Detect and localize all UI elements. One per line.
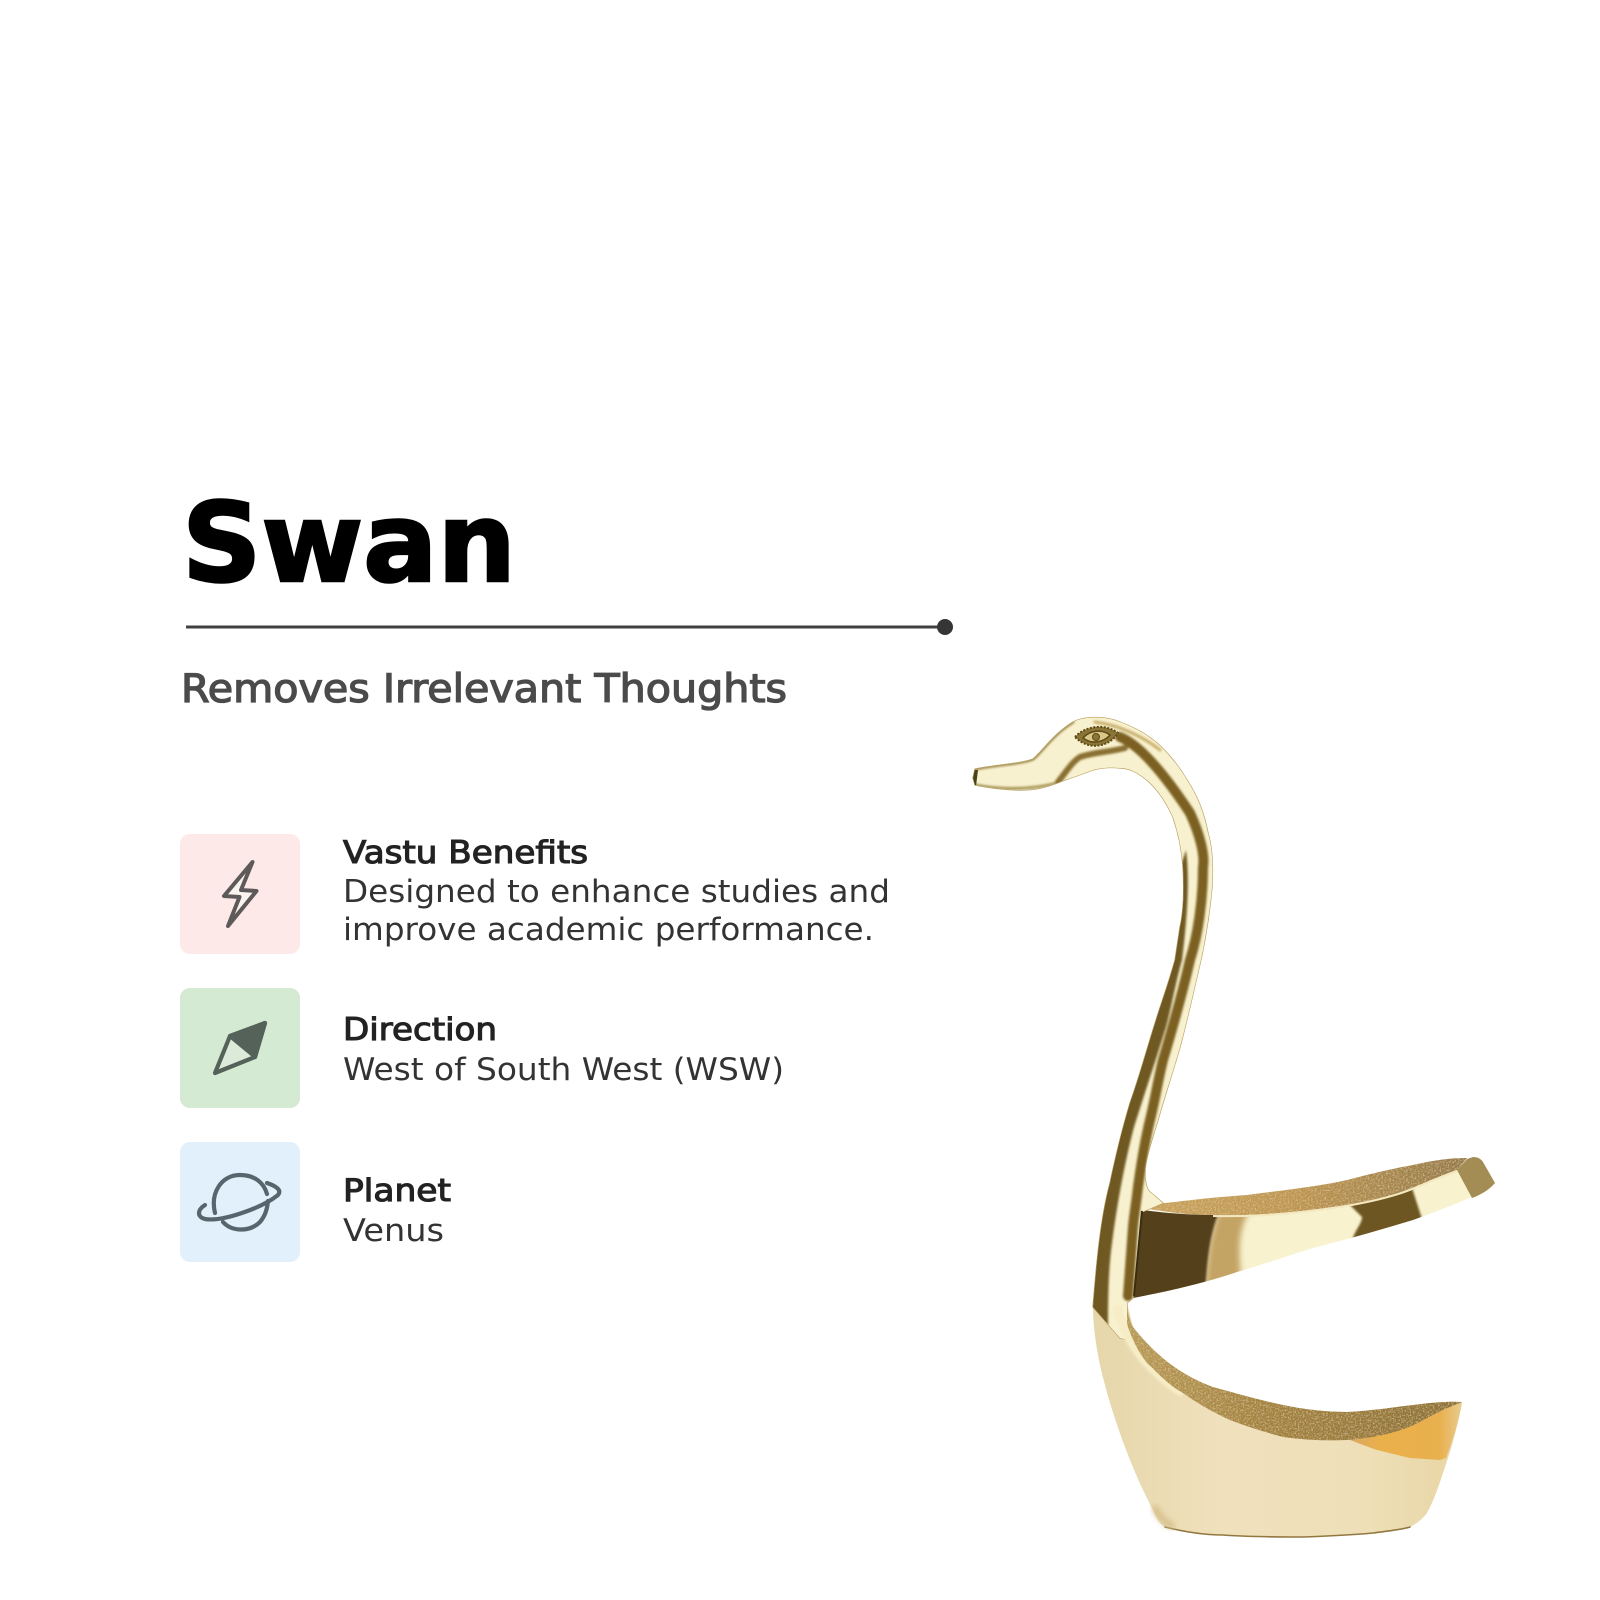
icon tile: pink: [180, 834, 300, 954]
panel: direction: [180, 988, 784, 1108]
icon tile: green: [180, 988, 300, 1108]
planet heading: Planet: [343, 1173, 451, 1209]
brass swan figurine: [960, 700, 1495, 1537]
icon: lightning bolt: [224, 862, 256, 926]
planet value: Venus: [343, 1213, 444, 1249]
swan bowl interior: [1127, 1303, 1462, 1440]
panel: vastu benefits: [180, 834, 890, 954]
benefit description second line: improve academic performance.: [343, 912, 874, 948]
title: Swan: [182, 479, 516, 607]
subtitle: Removes Irrelevant Thoughts: [181, 667, 787, 712]
direction value: West of South West (WSW): [343, 1052, 784, 1088]
swan neck and head: [972, 716, 1214, 1340]
swan bowl orange highlight: [1350, 1402, 1462, 1460]
benefit heading: Vastu Benefits: [343, 835, 588, 871]
swan eye engraving: [1075, 727, 1118, 746]
swan tail ring band: [1134, 1170, 1472, 1298]
swan bowl body: [1093, 1303, 1462, 1537]
benefit description: Designed to enhance studies and: [343, 874, 890, 910]
icon: compass needle: [215, 1023, 265, 1073]
divider line with dot: [186, 619, 953, 635]
swan tail ring tip: [1457, 1157, 1495, 1198]
swan tail ring interior: [1143, 1158, 1467, 1215]
swan lip highlight: [1117, 1305, 1183, 1393]
swan tail ring rim line: [1213, 1171, 1457, 1216]
panel: planet: [180, 1142, 451, 1262]
swan base shadow: [1155, 1508, 1410, 1537]
icon tile: blue: [180, 1142, 300, 1262]
swan neck seam: [1134, 1211, 1142, 1296]
direction heading: Direction: [343, 1012, 497, 1048]
icon: ringed planet: [199, 1175, 279, 1230]
infographic canvas: [180, 498, 1495, 1538]
